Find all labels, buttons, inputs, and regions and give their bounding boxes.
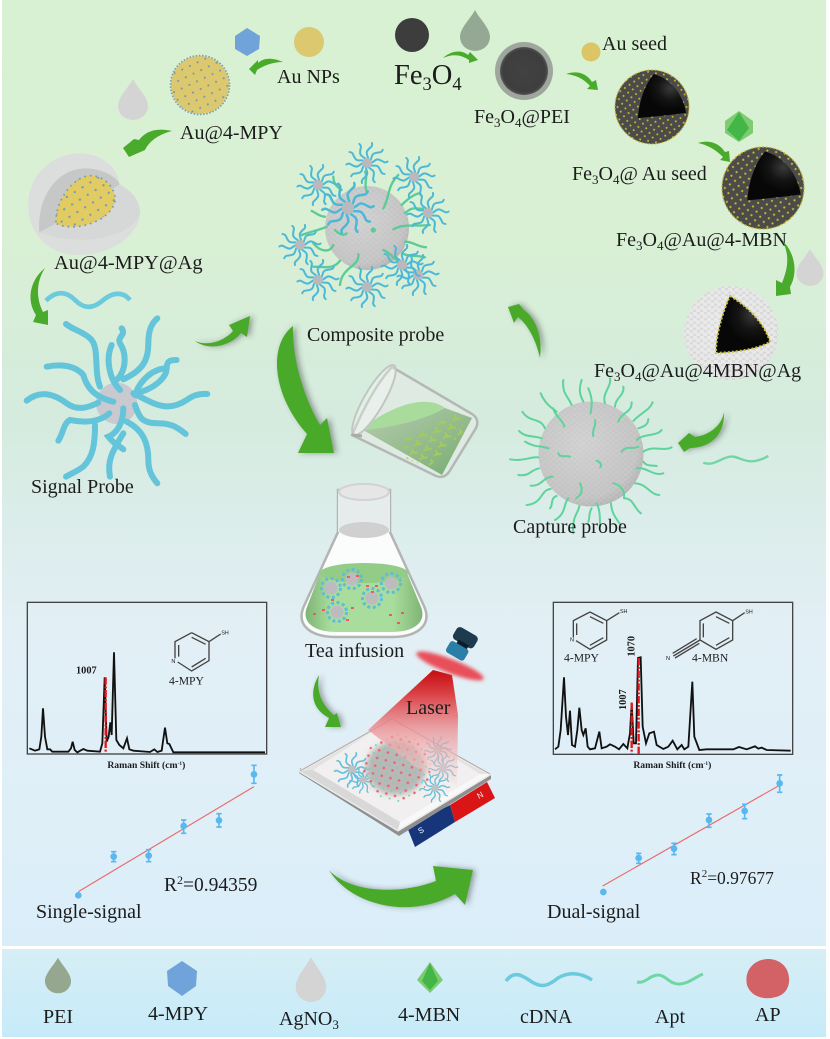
icon: cDNA strand bbox=[46, 293, 130, 307]
label: Apt: Apt bbox=[655, 1006, 685, 1028]
label: Fe3O4@Au@4-MBN: @Au@4-MBN bbox=[663, 229, 787, 251]
label: Dual-signal: Dual-signal bbox=[547, 901, 641, 923]
laser disc bbox=[414, 647, 486, 685]
spectrum line bbox=[555, 657, 791, 751]
arrow: to Ag shell bbox=[776, 240, 795, 296]
arrow: Au NPs to Au@4-MPY bbox=[249, 59, 283, 75]
particle: Fe3O4@Au@4MBN@Ag bbox=[684, 286, 778, 380]
label: Fe3O4@ Au seed: O bbox=[598, 163, 613, 185]
label: AgNO3: AgNO bbox=[279, 1008, 332, 1030]
label: N: N bbox=[570, 638, 574, 644]
icon: grey drop right bbox=[796, 249, 824, 286]
label: Raman Shift axis: -1 bbox=[704, 761, 708, 767]
label: Fe3O4@Au@4-MBN: O bbox=[642, 229, 657, 251]
particle: Fe3O4@PEI bbox=[495, 42, 553, 100]
label: Fe3O4@ Au seed: 3 bbox=[592, 172, 598, 187]
icon: PEI drop top bbox=[460, 10, 490, 51]
icon: Au seed bbox=[582, 42, 600, 62]
icon: blue hexagon 4-MPY bbox=[235, 28, 260, 56]
label: Au@4-MPY: Au@4-MPY bbox=[180, 122, 283, 144]
label: R2 single: R bbox=[164, 875, 177, 896]
label: R2 single: 2 bbox=[177, 873, 183, 887]
chart: single-signal regression bbox=[75, 765, 257, 899]
label: Laser: Laser bbox=[406, 697, 451, 719]
icon: green 4-MBN gem bbox=[725, 111, 753, 142]
label: Au NPs: Au NPs bbox=[277, 66, 340, 88]
flask: tea infusion bbox=[302, 484, 426, 637]
arrow: capture to composite bbox=[508, 304, 541, 358]
capture probe bbox=[510, 378, 672, 533]
icon: 4-MBN gem bbox=[417, 962, 443, 993]
label: 4-MPY: 4-MPY bbox=[148, 1003, 208, 1025]
arrow: signal to composite bbox=[195, 316, 250, 346]
label: Capture probe: Capture probe bbox=[513, 516, 627, 538]
label: 1070: 1070 bbox=[626, 636, 637, 657]
label: Fe3O4@Au@4MBN@Ag: Fe bbox=[594, 360, 614, 382]
label: N: N bbox=[171, 659, 175, 665]
spectrum line bbox=[29, 652, 265, 752]
arrow: big arrow to beaker bbox=[277, 326, 334, 453]
label: Fe3O4@PEI: 3 bbox=[494, 115, 500, 130]
label: 4-MBN: 4-MBN bbox=[692, 652, 729, 665]
red marker 1007 bbox=[102, 677, 109, 754]
label: Composite probe: Composite probe bbox=[307, 324, 444, 346]
label: SH: SH bbox=[745, 609, 753, 615]
beaker with tea bbox=[345, 360, 477, 477]
label: Fe3O4@Au@4-MBN: 3 bbox=[636, 238, 642, 253]
label: PEI: PEI bbox=[43, 1006, 73, 1028]
icon: Apt wave bbox=[637, 974, 703, 984]
panel: dual-signal Raman spectrum bbox=[553, 602, 793, 771]
label: Raman Shift axis: -1 bbox=[178, 761, 182, 767]
label: Fe3O4: 3 bbox=[422, 75, 432, 95]
label: Fe3O4@PEI: 4 bbox=[515, 115, 522, 130]
label: Fe3O4@PEI: O bbox=[500, 106, 515, 128]
label: 4-MBN: 4-MBN bbox=[398, 1004, 460, 1026]
laser beam bbox=[368, 670, 458, 785]
label: Fe3O4@ Au seed: @ Au seed bbox=[619, 163, 707, 185]
molecule: 4-MBN bbox=[673, 612, 745, 658]
label: Fe3O4@ Au seed: Fe bbox=[572, 163, 592, 185]
label: 4-MPY: 4-MPY bbox=[564, 652, 600, 665]
magnet: S bbox=[416, 825, 426, 836]
particle: Fe3O4@Au seed bbox=[615, 70, 689, 144]
signal probe bbox=[27, 318, 207, 483]
label: Fe3O4@Au@4MBN@Ag: @Au@4MBN@Ag bbox=[641, 360, 801, 382]
icon: gold Au NP bbox=[294, 27, 324, 57]
label: Fe3O4: 4 bbox=[452, 75, 462, 95]
magnet: N bbox=[476, 790, 485, 801]
icon: PEI drop bbox=[45, 958, 71, 993]
label: Fe3O4@Au@4-MBN: 4 bbox=[657, 238, 664, 253]
label: Au seed: Au seed bbox=[602, 33, 667, 55]
label: 4-MPY: 4-MPY bbox=[169, 674, 205, 687]
label: Raman Shift axis: ) bbox=[708, 760, 711, 771]
particle: Fe3O4@Au@4-MBN bbox=[722, 147, 804, 229]
arrow: to Au@4-MPY@Ag bbox=[123, 130, 172, 157]
label: N: N bbox=[666, 656, 670, 662]
label: AP: AP bbox=[755, 1004, 781, 1026]
arrow: Apt to capture probe bbox=[678, 412, 724, 452]
label: cDNA: cDNA bbox=[520, 1006, 573, 1028]
arrow: Fe3O4 to PEI bbox=[443, 52, 478, 63]
label: Au@4-MPY@Ag: Au@4-MPY@Ag bbox=[54, 252, 203, 274]
label: 1007: 1007 bbox=[76, 665, 97, 676]
label: Tea infusion: Tea infusion bbox=[305, 640, 404, 662]
icon: AgNO3 drop bbox=[296, 957, 326, 1002]
arrow: to 4-MBN particle bbox=[698, 142, 730, 162]
arrow: flask to plate bbox=[313, 675, 341, 727]
arrow: to signal probe bbox=[30, 268, 48, 325]
label: Fe3O4: O bbox=[432, 60, 452, 91]
composite probe bbox=[279, 143, 449, 307]
icon: black Fe3O4 core bbox=[395, 18, 429, 52]
icon: 4-MPY hexagon bbox=[167, 961, 197, 996]
label: 1007: 1007 bbox=[618, 689, 629, 710]
label: Fe3O4: Fe bbox=[394, 60, 422, 91]
label: Fe3O4@Au@4MBN@Ag: 4 bbox=[635, 369, 642, 384]
label: Raman Shift axis: ) bbox=[182, 760, 185, 771]
particle: Au@4-MPY bbox=[170, 56, 230, 114]
arrow: to Au seed particle bbox=[566, 72, 598, 90]
label: R2 dual: 2 bbox=[702, 868, 707, 880]
label: Fe3O4@PEI: Fe bbox=[474, 106, 494, 128]
label: Fe3O4@Au@4MBN@Ag: 3 bbox=[614, 369, 620, 384]
glass plate bbox=[299, 719, 491, 836]
label: R2 single: =0.94359 bbox=[183, 875, 257, 896]
icon: laser camera bbox=[444, 626, 479, 663]
chart: dual-signal regression bbox=[600, 775, 783, 895]
molecule: 4-MPY bbox=[175, 633, 221, 671]
red markers bbox=[632, 658, 639, 754]
magnet bbox=[407, 782, 495, 847]
label: Raman Shift axis: Raman Shift (cm bbox=[107, 760, 178, 771]
label: SH: SH bbox=[620, 609, 628, 615]
molecule: 4-MPY bbox=[573, 612, 619, 649]
arrow: big bottom arrow bbox=[329, 866, 473, 907]
label: Signal Probe: Signal Probe bbox=[31, 476, 134, 498]
panel: legend bbox=[2, 949, 826, 1037]
icon: AP blob bbox=[746, 959, 789, 998]
label: R2 dual: =0.97677 bbox=[707, 868, 774, 888]
icon: Apt strand bbox=[703, 456, 768, 464]
icon: grey AgNO3 drop bbox=[118, 79, 148, 120]
label: AgNO3: 3 bbox=[332, 1017, 339, 1032]
label: Fe3O4@ Au seed: 4 bbox=[613, 172, 620, 187]
label: SH: SH bbox=[221, 630, 229, 636]
label: Fe3O4@Au@4-MBN: Fe bbox=[616, 229, 636, 251]
label: Raman Shift axis: Raman Shift (cm bbox=[633, 760, 704, 771]
icon: cDNA wave bbox=[506, 974, 592, 985]
label: Fe3O4@Au@4MBN@Ag: O bbox=[620, 360, 635, 382]
particle: Au@4-MPY@Ag cut sphere bbox=[28, 153, 140, 255]
label: R2 dual: R bbox=[690, 868, 702, 888]
label: Fe3O4@PEI: @PEI bbox=[521, 106, 570, 128]
label: Single-signal: Single-signal bbox=[36, 901, 142, 923]
panel: single-signal Raman spectrum bbox=[27, 602, 267, 771]
